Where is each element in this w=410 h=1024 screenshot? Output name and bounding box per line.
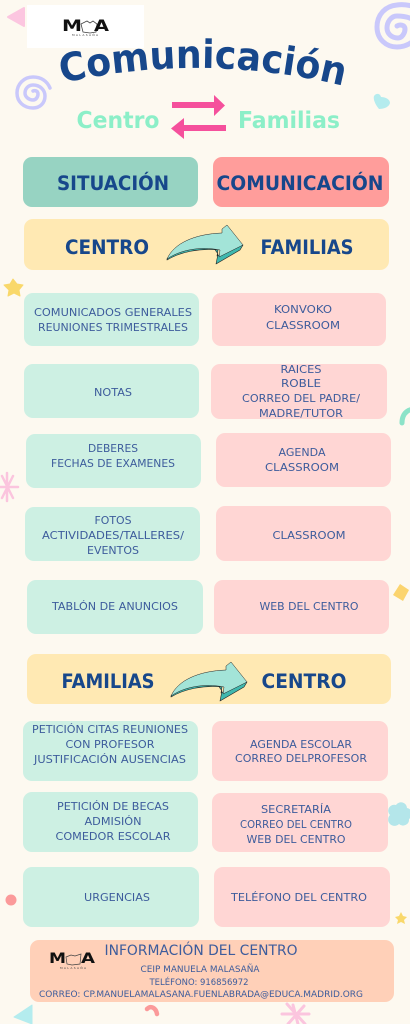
icon: exchange arrows: [171, 95, 226, 139]
banner: familias to centro: FAMILIAS: [62, 670, 154, 693]
title: Comunicación: [60, 38, 344, 86]
row 6: PETICIÓN CITAS REUNIONES: [32, 723, 188, 736]
row 2: [24, 364, 199, 418]
row 4 channel: [216, 506, 391, 561]
row 1 channel: CLASSROOM: [266, 320, 340, 332]
row 1: [24, 293, 199, 346]
row 7: COMEDOR ESCOLAR: [56, 831, 170, 843]
row 5: TABLÓN DE ANUNCIOS: [51, 600, 178, 613]
row 7: PETICIÓN DE BECAS: [57, 800, 169, 813]
row 7: ADMISIÓN: [84, 815, 142, 828]
row 3: FECHAS DE EXAMENES: [51, 458, 175, 470]
banner: familias to centro: [27, 654, 391, 704]
banner: centro to familias: CENTRO: [65, 236, 149, 259]
row 1 channel: KONVOKO: [274, 304, 332, 316]
heading: comunicación: COMUNICACIÓN: [216, 171, 384, 195]
logo footer: A: [81, 951, 95, 967]
row 4: [25, 507, 200, 561]
row 2 channel: CORREO DEL PADRE/: [242, 393, 360, 405]
logo footer: MALASAÑA: [60, 965, 87, 970]
row 3 channel: CLASSROOM: [265, 462, 339, 474]
row 5 channel: WEB DEL CENTRO: [260, 601, 358, 613]
row 4 channel: CLASSROOM: [272, 530, 346, 542]
footer: información del centro: INFORMACIÓN DEL CENTRO: [104, 941, 298, 959]
logo top: [27, 5, 144, 48]
row 4: EVENTOS: [87, 545, 139, 557]
row 1: COMUNICADOS GENERALES: [34, 307, 192, 319]
row 7 channel: CORREO DEL CENTRO: [240, 819, 352, 831]
row 8: [23, 867, 199, 927]
footer: información del centro: CEIP MANUELA MALASAÑA: [140, 964, 260, 975]
row 5 channel: [214, 580, 389, 634]
banner: centro to familias: FAMILIAS: [260, 236, 354, 259]
logo footer: [49, 951, 95, 970]
logo footer: M: [49, 951, 66, 967]
row 2 channel: [211, 364, 387, 420]
banner: familias to centro: CENTRO: [262, 670, 346, 693]
heading: comunicación: [213, 157, 389, 207]
row 4: ACTIVIDADES/TALLERES/: [42, 530, 185, 542]
logo top: M: [62, 16, 82, 35]
footer: información del centro: [30, 940, 394, 1002]
row 6 channel: CORREO DELPROFESOR: [235, 753, 367, 765]
row 3: DEBERES: [88, 443, 138, 455]
footer: información del centro: CORREO: CP.MANUELAMALASANA.FUENLABRADA@EDUCA.MADRID.ORG: [39, 990, 363, 1000]
row 4: FOTOS: [94, 515, 132, 527]
row 6: CON PROFESOR: [66, 739, 154, 751]
subtitle: Centro: Centro: [76, 108, 160, 134]
row 6 channel: [212, 721, 388, 781]
row 3: [26, 434, 201, 488]
row 7 channel: WEB DEL CENTRO: [246, 834, 346, 846]
banner: centro to familias: [24, 219, 389, 270]
subtitle: Familias: Familias: [238, 108, 340, 134]
footer: información del centro: TELÉFONO: 916856972: [149, 976, 248, 988]
row 1 channel: [212, 293, 386, 346]
row 7: [23, 792, 198, 852]
icon: curved arrow: [167, 225, 243, 264]
row 2: NOTAS: [94, 387, 132, 399]
heading: situación: [23, 157, 198, 207]
logo top: A: [94, 16, 110, 35]
logo top: MALASAÑA: [72, 32, 99, 37]
row 1: REUNIONES TRIMESTRALES: [38, 322, 188, 334]
row 8: URGENCIAS: [84, 892, 150, 904]
row 5: [27, 580, 203, 634]
row 3 channel: AGENDA: [278, 447, 326, 459]
row 6: [23, 721, 198, 781]
row 3 channel: [216, 433, 391, 487]
row 6 channel: AGENDA ESCOLAR: [250, 739, 352, 751]
row 7 channel: SECRETARÍA: [261, 803, 332, 816]
icon: curved arrow: [171, 662, 247, 701]
row 2 channel: MADRE/TUTOR: [259, 408, 343, 420]
row 8 channel: TELÉFONO DEL CENTRO: [230, 891, 367, 904]
row 2 channel: RAICES: [280, 364, 322, 376]
row 8 channel: [214, 867, 390, 927]
row 6: JUSTIFICACIÓN AUSENCIAS: [33, 753, 186, 766]
row 2 channel: ROBLE: [281, 378, 321, 390]
heading: situación: SITUACIÓN: [57, 171, 169, 195]
row 7 channel: [212, 793, 388, 852]
